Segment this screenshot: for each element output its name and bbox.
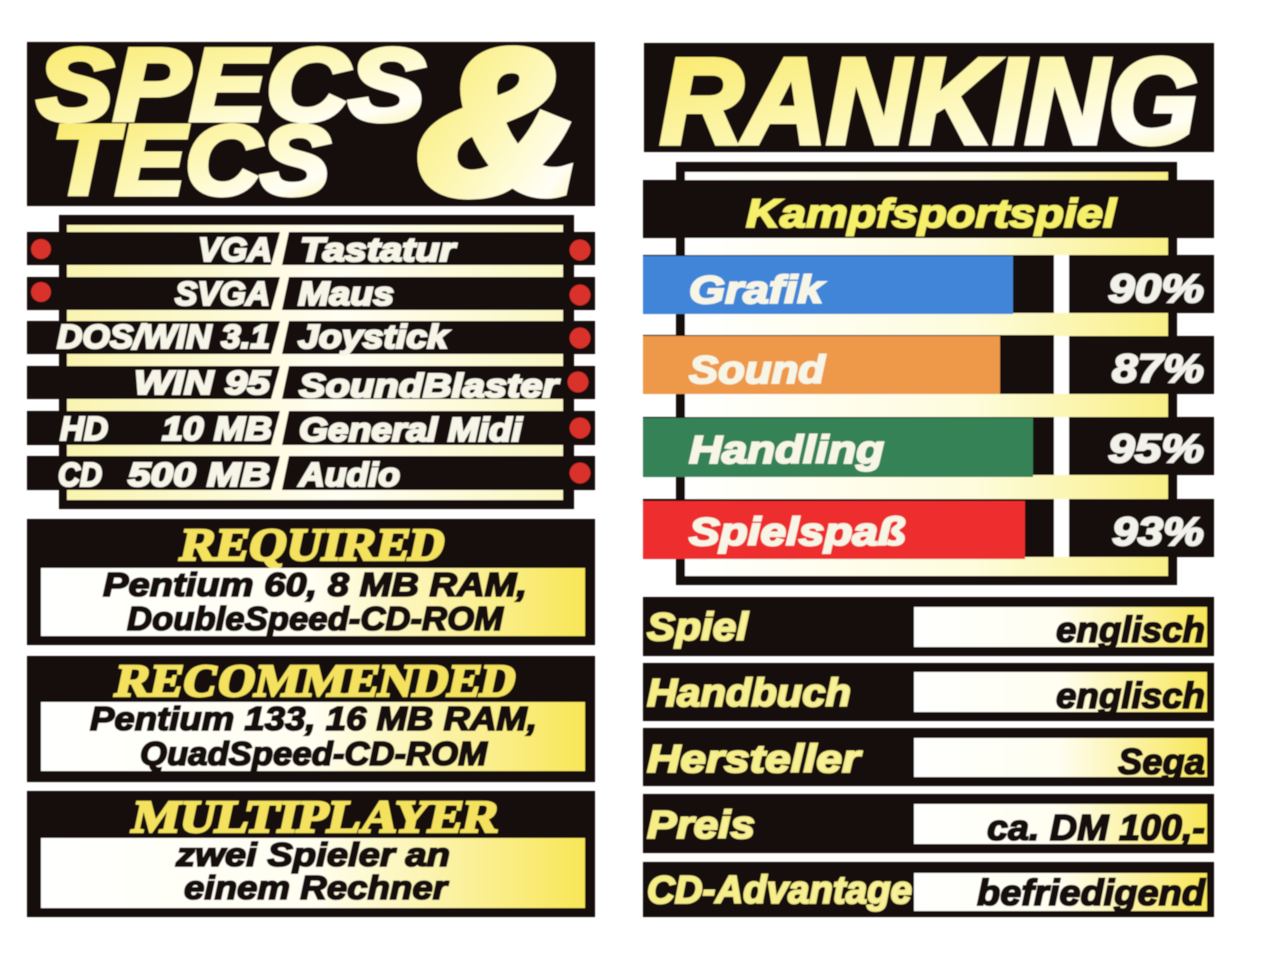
title: ampersand: & [418,8,580,236]
title: TECS: TECS [52,105,330,215]
panel: ratings [643,162,1214,585]
row: HD 10 MB / General Midi: HD [60,410,108,447]
row: CD 500 MB / Audio: 500 MB [128,456,270,493]
row: HD 10 MB / General Midi [27,410,595,448]
row: WIN 95 / SoundBlaster: SoundBlaster [299,367,561,404]
text: recommended system: QuadSpeed-CD-ROM [140,735,489,772]
heading: Required: REQUIRED [176,520,450,571]
rating bar: Sound 87%: 87% [1112,347,1204,391]
info row: Spiel [643,597,1214,656]
row: SVGA / Maus: Maus [298,275,394,312]
title: Ranking: RANKING [660,33,1198,169]
row: CD 500 MB / Audio: Audio [298,456,400,493]
row: SVGA / Maus: SVGA [175,275,270,312]
row: VGA / Tastatur: Tastatur [300,231,458,268]
panel: Ranking title [644,33,1214,169]
row: HD 10 MB / General Midi: 10 MB [162,410,272,447]
info row: Preis: ca. DM 100,- [987,807,1205,848]
text: required system: DoubleSpeed-CD-ROM [127,600,505,637]
panel: Required [27,519,595,645]
info row: Handbuch: Handbuch [647,672,851,715]
row: HD 10 MB / General Midi: General Midi [299,411,523,448]
text: recommended system: Pentium 133, 16 MB RAM, [90,700,537,737]
info row: Hersteller: Hersteller [647,738,862,781]
rating bar: Sound 87%: Sound [689,349,826,392]
info row: Handbuch [643,663,1214,721]
info row: Preis [643,794,1214,853]
rating bar: Spielspaß 93%: Spielspaß [689,511,906,554]
panel: Multiplayer [27,791,595,917]
info row: CD-Advantage: CD-Advantage [647,869,912,912]
text: required system: Pentium 60, 8 MB RAM, [103,566,527,603]
text: multiplayer info: zwei Spieler an [175,836,450,873]
row: VGA / Tastatur [27,231,595,268]
panel: Recommended [27,656,595,782]
rating bar: Spielspaß 93%: 93% [1112,510,1204,554]
row: DOS/WIN 3.1 / Joystick: DOS/WIN 3.1 [57,318,270,355]
panel: Specs & Tecs title [27,8,595,236]
text: multiplayer info: einem Rechner [184,869,449,906]
genre bar: Kampfsportspiel [643,180,1214,238]
row: WIN 95 / SoundBlaster: WIN 95 [134,364,271,401]
rating bar: Handling 95% [643,417,1214,477]
rating bar: Grafik 90% [643,255,1214,314]
row: CD 500 MB / Audio [27,456,595,493]
info row: Hersteller: Sega [1118,741,1205,782]
text: required system [103,566,527,637]
heading: Recommended: RECOMMENDED [111,656,521,707]
row: VGA / Tastatur: VGA [198,231,272,268]
text: recommended system [90,700,537,772]
rating bar: Spielspaß 93% [643,499,1214,559]
rating bar: Handling 95%: Handling [689,429,884,472]
heading: Multiplayer: MULTIPLAYER [128,792,505,843]
rating bar: Sound 87% [643,335,1214,394]
info row: CD-Advantage: befriedigend [977,872,1206,913]
info row: Preis: Preis [647,804,755,847]
row: DOS/WIN 3.1 / Joystick [27,318,595,355]
row: SVGA / Maus [27,275,595,312]
panel: hardware specs [27,215,595,509]
title: SPECS: SPECS [37,28,425,142]
info row: CD-Advantage [643,862,1214,917]
genre bar: Kampfsportspiel: Kampfsportspiel [746,192,1117,236]
rating bar: Grafik 90%: 90% [1108,267,1204,311]
row: WIN 95 / SoundBlaster [27,364,595,404]
row: DOS/WIN 3.1 / Joystick: Joystick [298,318,450,355]
info row: Spiel: Spiel [647,606,749,649]
rating bar: Grafik 90%: Grafik [689,269,826,312]
info row: Spiel: englisch [1056,609,1205,650]
text: multiplayer info [175,836,450,906]
info row: Handbuch: englisch [1056,675,1205,716]
info row: Hersteller [643,728,1214,786]
row: CD 500 MB / Audio: CD [58,456,102,493]
rating bar: Handling 95%: 95% [1108,427,1204,471]
